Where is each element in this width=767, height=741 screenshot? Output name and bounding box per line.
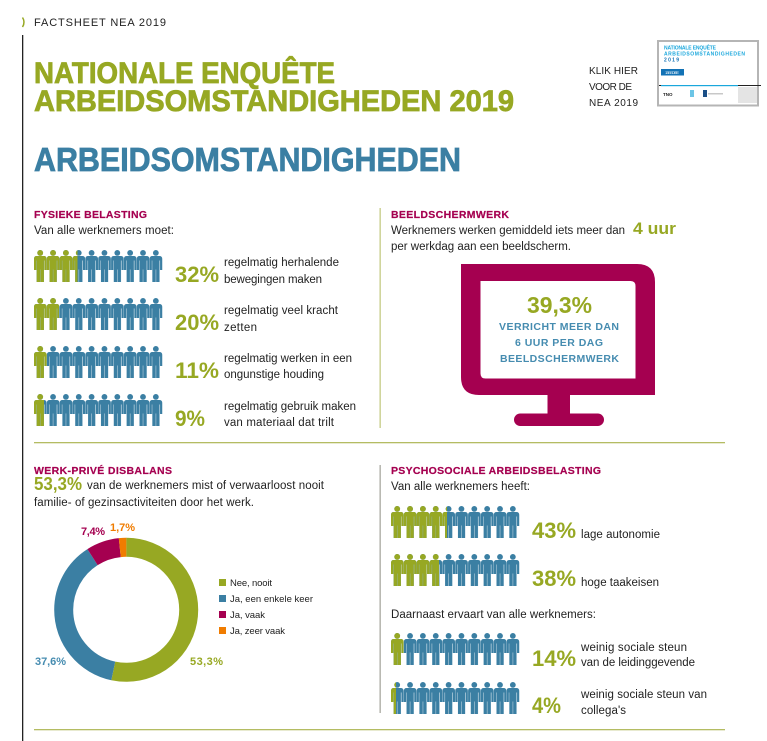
thumbnail: report cover: ARBEIDSOMSTANDIGHEDEN — [664, 52, 745, 58]
label 9%: regelmatig gebruik maken — [224, 401, 356, 413]
icon: monitor — [461, 264, 655, 426]
label 11%: regelmatig werken in een — [224, 353, 352, 365]
panel: fysieke belasting — [34, 209, 356, 431]
intro text with 4 uur: 4 uur — [633, 219, 676, 238]
title: ARBEIDSOMSTANDIGHEDEN 2019 — [34, 85, 514, 118]
label 4% — [580, 689, 707, 717]
donut value labels: 37,6% — [35, 656, 66, 668]
label 4%: weinig sociale steun van — [580, 689, 707, 701]
label 43%: lage autonomie — [581, 529, 660, 541]
pictogram row 20% — [34, 298, 162, 330]
header label: factsheet: FACTSHEET NEA 2019 — [34, 17, 166, 29]
thumbnail: report cover: 13E EDITIE — [665, 70, 679, 75]
label 32%: regelmatig herhalende — [224, 257, 339, 269]
label 14% — [580, 642, 695, 669]
intro text with 53,3%: van de werknemers mist of verwaarloost nooit — [87, 480, 325, 492]
intro text with 4 uur — [391, 219, 676, 253]
label 14%: van de leidinggevende — [581, 657, 695, 669]
link text: klik hier: NEA 2019 — [589, 98, 638, 109]
intro text with 4 uur: per werkdag aan een beeldscherm. — [391, 241, 571, 253]
pictogram row 38% — [391, 554, 519, 586]
label 11%: ongunstige houding — [224, 369, 324, 381]
intro text with 53,3%: familie- of gezinsactiviteiten door het werk. — [34, 497, 254, 509]
pictogram row 11% — [34, 346, 162, 378]
label 14%: weinig sociale steun — [580, 642, 687, 654]
subheading text: Daarnaast ervaart van alle werknemers: — [391, 609, 596, 621]
panel: werk-prive disbalans — [34, 464, 325, 672]
intro text with 4 uur: Werknemers werken gemiddeld iets meer dan — [391, 225, 625, 237]
stat 9%: 9% — [175, 406, 205, 431]
title — [34, 56, 514, 118]
heading: fysieke belasting: FYSIEKE BELASTING — [34, 209, 147, 221]
donut value labels: 7,4% — [81, 526, 105, 538]
thumbnail: report cover: 2019 — [664, 58, 679, 64]
stat 4%: 4% — [532, 693, 561, 718]
link text: klik hier — [589, 66, 638, 109]
legend: Nee, nooit — [230, 578, 272, 589]
thumbnail: report cover: NATIONALE ENQUÊTE — [664, 44, 717, 52]
panel: beeldschermwerk — [391, 209, 676, 426]
heading: werk-prive disbalans: WERK-PRIVÉ DISBALANS — [34, 464, 172, 477]
donut chart — [64, 547, 189, 672]
link text: klik hier: KLIK HIER — [589, 66, 638, 77]
stat 20%: 20% — [175, 310, 219, 335]
legend: Ja, zeer vaak — [230, 626, 285, 637]
pictogram row 43% — [391, 506, 519, 538]
stat 32%: 32% — [175, 262, 219, 287]
monitor stat text: 6 UUR PER DAG — [515, 337, 603, 349]
donut value labels: 1,7% — [110, 522, 135, 534]
pictogram row 4% — [391, 682, 519, 714]
label 32% — [224, 257, 339, 286]
pictogram row 9% — [34, 394, 162, 426]
stat 43%: 43% — [532, 518, 576, 543]
link text: klik hier: VOOR DE — [589, 82, 632, 93]
monitor stat text — [499, 292, 619, 365]
thumbnail: report cover — [658, 41, 761, 106]
monitor stat text: 39,3% — [527, 292, 592, 318]
intro text: Van alle werknemers heeft: — [391, 481, 530, 493]
thumbnail: report cover: TNO — [663, 92, 673, 97]
monitor stat text: BEELDSCHERMWERK — [500, 353, 619, 365]
donut value labels: 53,3% — [190, 656, 223, 668]
pictogram row 32% — [34, 250, 162, 282]
label 20%: regelmatig veel kracht — [224, 305, 339, 317]
heading: psychosociale arbeidsbelasting: PSYCHOSOCIALE ARBEIDSBELASTING — [391, 465, 601, 477]
panel: psychosociale arbeidsbelasting — [391, 465, 707, 718]
intro text: Van alle werknemers moet: — [34, 225, 174, 237]
pictogram row 14% — [391, 633, 519, 665]
monitor stat text: VERRICHT MEER DAN — [499, 321, 619, 333]
section heading: ARBEIDSOMSTANDIGHEDEN — [34, 141, 461, 178]
intro text with 53,3%: 53,3% — [34, 474, 82, 494]
label 38%: hoge taakeisen — [581, 577, 659, 589]
label 20% — [224, 305, 339, 334]
legend — [219, 578, 313, 637]
label 11% — [224, 353, 352, 381]
donut value labels — [35, 522, 223, 668]
label 9% — [224, 401, 356, 429]
label 4%: collega's — [581, 705, 626, 717]
label 20%: zetten — [224, 322, 257, 334]
intro text with 53,3% — [34, 474, 325, 509]
left vertical rule — [22, 35, 23, 741]
legend: Ja, een enkele keer — [230, 594, 313, 605]
label 32%: bewegingen maken — [224, 274, 322, 286]
legend: Ja, vaak — [230, 610, 265, 621]
stat 14%: 14% — [532, 646, 576, 671]
stat 38%: 38% — [532, 566, 576, 591]
title: NATIONALE ENQUÊTE — [34, 56, 335, 90]
label 9%: van materiaal dat trilt — [224, 417, 335, 429]
heading: beeldschermwerk: BEELDSCHERMWERK — [391, 209, 509, 221]
stat 11%: 11% — [175, 358, 219, 383]
